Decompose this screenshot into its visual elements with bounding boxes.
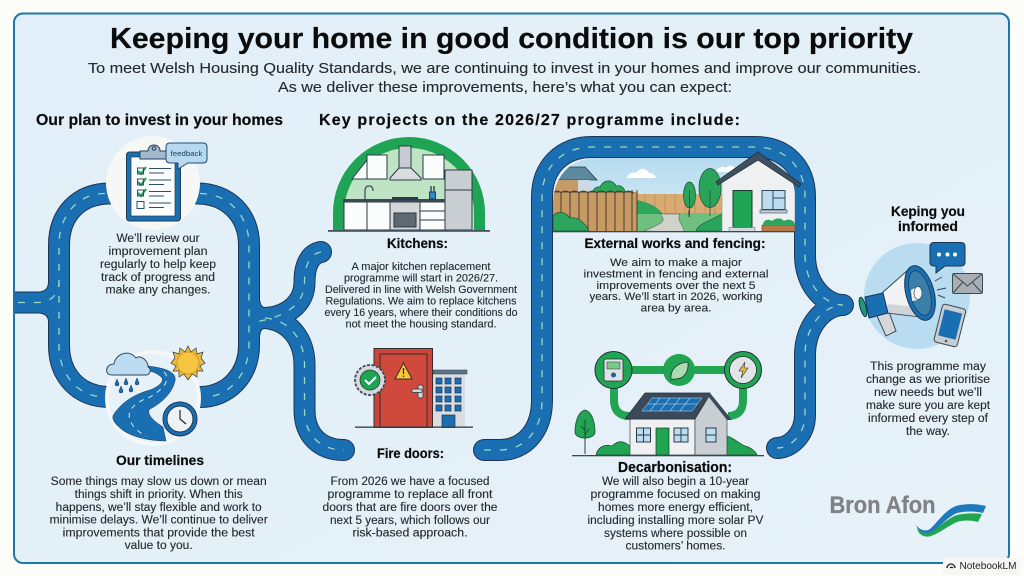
text: decarbonisation: including installing more solar PV <box>588 515 764 527</box>
heading: our timelines: Our timelines <box>116 452 204 468</box>
text: plan review: improvement plan <box>108 246 208 258</box>
text: fire doors: doors that are fire doors over the <box>322 502 498 514</box>
icon: megaphone with messages <box>858 242 982 349</box>
illustration: decarbonisation home <box>572 352 764 456</box>
heading: fire doors: Fire doors: <box>377 445 444 461</box>
text: kitchens: A major kitchen replacement <box>352 261 490 273</box>
road: central loop <box>484 147 843 450</box>
text: keeping you informed: make sure you are kept <box>866 400 991 412</box>
text: external works: improvements over the next 5 <box>596 280 756 292</box>
heading: keeping you informed: informed <box>898 218 958 234</box>
text: timelines: things shift in priority. When this <box>75 489 243 501</box>
text: plan review: make any changes. <box>106 284 210 296</box>
icon: weather, winding road and clock <box>107 346 205 444</box>
text: kitchens: Delivered in line with Welsh Government <box>325 284 517 296</box>
text: timelines: happens, we’ll stay flexible and work to <box>56 502 262 514</box>
icon: clipboard with feedback bubble <box>106 136 207 230</box>
text: keeping you informed: the way. <box>906 426 950 438</box>
text: timelines: improvements that provide the best <box>63 528 256 540</box>
text: fire doors: From 2026 we have a focused <box>330 476 490 488</box>
text: external works: investment in fencing and external <box>584 268 768 280</box>
text: decarbonisation: programme focused on making <box>590 489 760 501</box>
text: kitchens: Regulations. We aim to replace kitchens <box>326 296 517 308</box>
text: external works: years. We’ll start in 2026, working <box>590 291 762 303</box>
text: plan review: We’ll review our <box>116 233 200 245</box>
title: Keeping your home in good condition is our top priority <box>110 23 913 55</box>
watermark: NotebookLM <box>943 558 1020 575</box>
text: decarbonisation: homes more energy efficient, <box>598 502 753 514</box>
watermark: NotebookLM: NotebookLM <box>960 560 1016 572</box>
text: keeping you informed <box>866 361 991 438</box>
text: fire doors <box>322 476 498 540</box>
text: keeping you informed: This programme may <box>870 361 986 373</box>
heading: external works: External works and fencing: <box>584 235 766 251</box>
text: kitchens <box>324 261 518 330</box>
text: plan review: regularly to help keep <box>100 259 216 271</box>
icon: fire door and building <box>355 348 473 428</box>
icon: kitchen arch <box>328 142 490 232</box>
text: kitchens: every 16 years, where their conditions do <box>324 307 518 319</box>
text: keeping you informed: new needs but we’ll <box>874 387 982 399</box>
text: plan review: track of progress and <box>101 272 215 284</box>
text: decarbonisation: We will also begin a 10-year <box>602 476 749 488</box>
heading: keeping you informed <box>891 203 965 234</box>
text: kitchens: programme will start in 2026/27. <box>344 272 498 284</box>
text: decarbonisation: systems where possible on <box>604 528 747 540</box>
logo: Bron Afon: Bron Afon <box>830 492 936 519</box>
heading: decarbonisation: Decarbonisation: <box>618 460 732 476</box>
intro text: To meet Welsh Housing Quality Standards, we are continuing to invest in your homes and improve our communities. <box>88 61 921 77</box>
text: fire doors: risk-based approach. <box>352 528 468 540</box>
text: external works <box>584 257 768 314</box>
heading: our plan: Our plan to invest in your homes <box>36 112 283 129</box>
icon: clipboard with feedback bubble: feedback <box>170 149 203 158</box>
text: keeping you informed: change as we prioritise <box>866 374 990 386</box>
logo: Bron Afon <box>830 492 986 537</box>
text: external works: area by area. <box>640 302 712 314</box>
text: fire doors: programme to replace all front <box>328 489 493 501</box>
heading: key projects: Key projects on the 2026/27 programme include: <box>319 112 740 129</box>
text: timelines: minimise delays. We’ll continue to deliver <box>50 514 268 526</box>
text: keeping you informed: informed every step of <box>868 413 989 425</box>
intro text: As we deliver these improvements, here’s what you can expect: <box>278 80 732 96</box>
text: fire doors: next 5 years, which follows our <box>330 515 490 527</box>
text: plan review <box>100 233 216 296</box>
text: timelines: value to you. <box>125 540 193 552</box>
heading: kitchens: Kitchens: <box>387 235 448 251</box>
text: kitchens: not meet the housing standard. <box>346 318 496 330</box>
text: decarbonisation <box>588 476 764 552</box>
illustration: external works scene <box>553 152 801 232</box>
text: timelines <box>50 476 268 552</box>
text: decarbonisation: customers’ homes. <box>626 540 726 552</box>
text: timelines: Some things may slow us down or mean <box>51 476 267 488</box>
intro text <box>88 61 921 96</box>
road: left loop <box>2 194 344 450</box>
heading: keeping you informed: Keping you <box>891 203 965 219</box>
text: external works: We aim to make a major <box>610 257 742 269</box>
